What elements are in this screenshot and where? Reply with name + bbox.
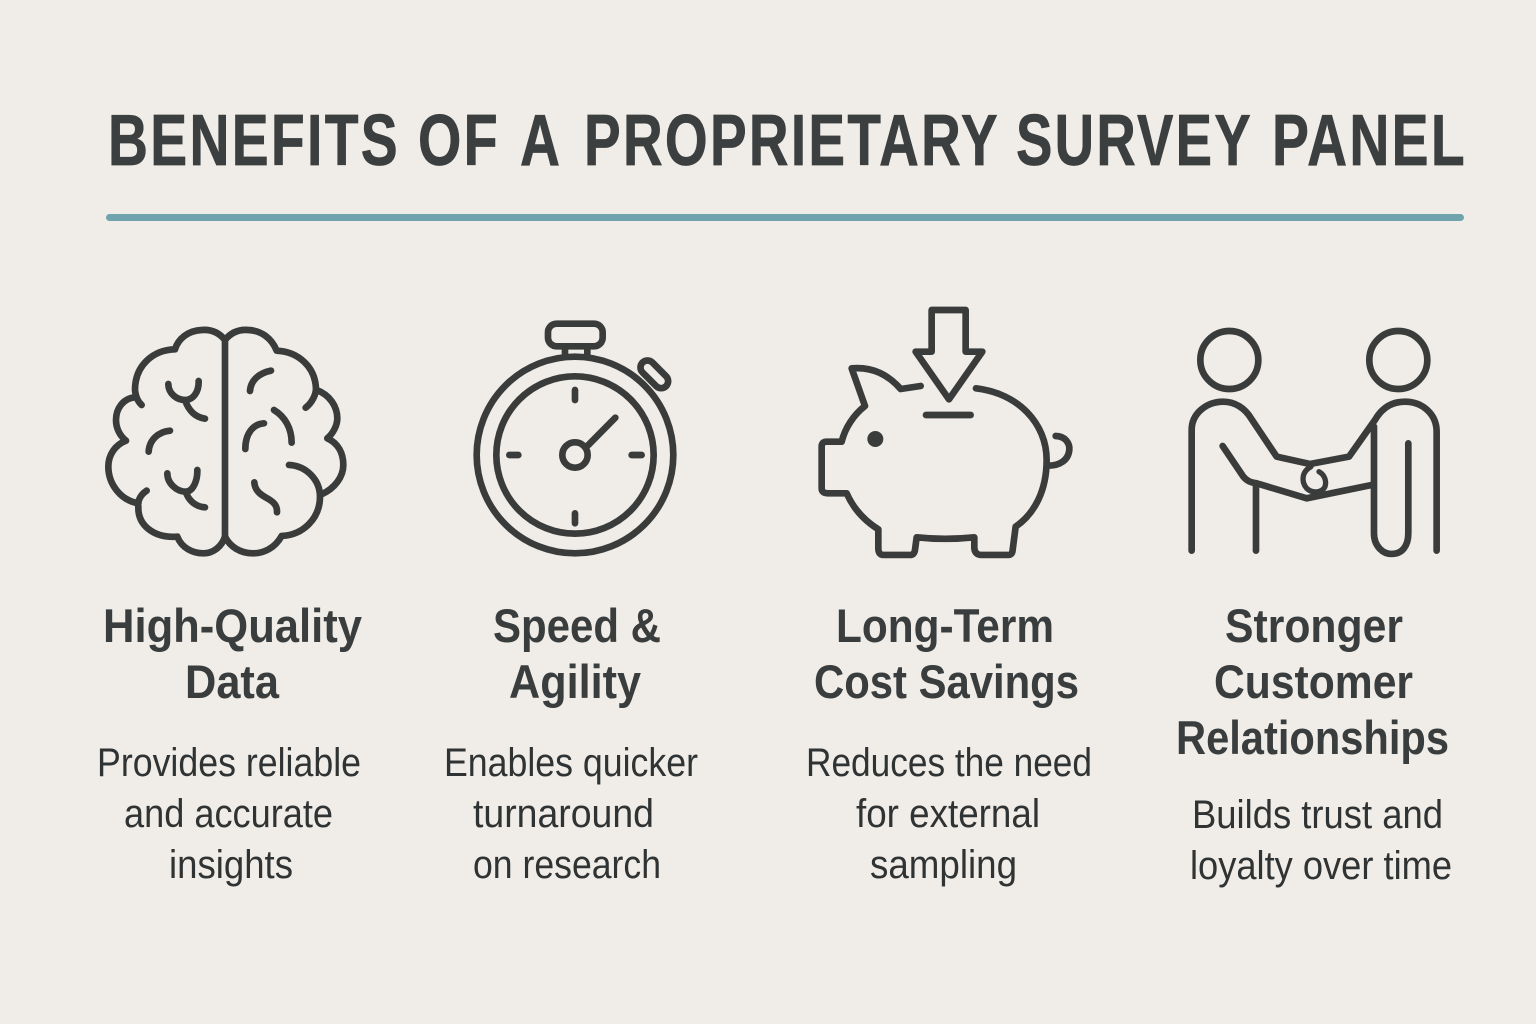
heading: Stronger [1225,599,1403,652]
description: on research [473,843,661,887]
description [1190,793,1452,888]
panel: Stronger Customer Relationships [1176,331,1452,888]
description: for external [856,792,1040,836]
heading: Customer [1214,655,1413,708]
description [97,741,361,887]
title: A [520,101,560,181]
heading: High-Quality [103,599,362,652]
title: PROPRIETARY [584,101,1000,181]
heading: Speed & [493,599,661,652]
heading: Agility [509,655,641,708]
panel: High-Quality Data [97,330,362,887]
description: Enables quicker [444,741,698,785]
description: insights [169,843,293,887]
title: SURVEY [1016,101,1253,181]
description: Reduces the need [806,741,1092,785]
title [108,101,1467,181]
description: Provides reliable [97,741,361,785]
heading [493,599,661,708]
panel: Speed & Agility [444,324,698,887]
description: loyalty over time [1190,844,1452,888]
title: OF [418,101,500,181]
heading: Data [185,655,280,708]
description [806,741,1092,887]
heading [103,599,362,708]
icon: stopwatch [477,324,673,553]
title: BENEFITS [108,101,400,181]
description [444,741,698,887]
description: sampling [870,843,1017,887]
title underline [106,214,1464,221]
heading: Relationships [1176,711,1449,764]
title: PANEL [1272,101,1467,181]
panel: Long-Term Cost Savings [806,310,1092,887]
heading: Cost Savings [814,655,1079,708]
description: and accurate [124,792,333,836]
icon: handshake [1192,331,1437,554]
heading: Long-Term [836,599,1054,652]
description: Builds trust and [1192,793,1443,837]
description: turnaround [473,792,654,836]
heading [814,599,1079,708]
heading [1176,599,1449,764]
icon: brain [108,330,343,553]
icon: piggy bank with arrow [822,310,1069,555]
